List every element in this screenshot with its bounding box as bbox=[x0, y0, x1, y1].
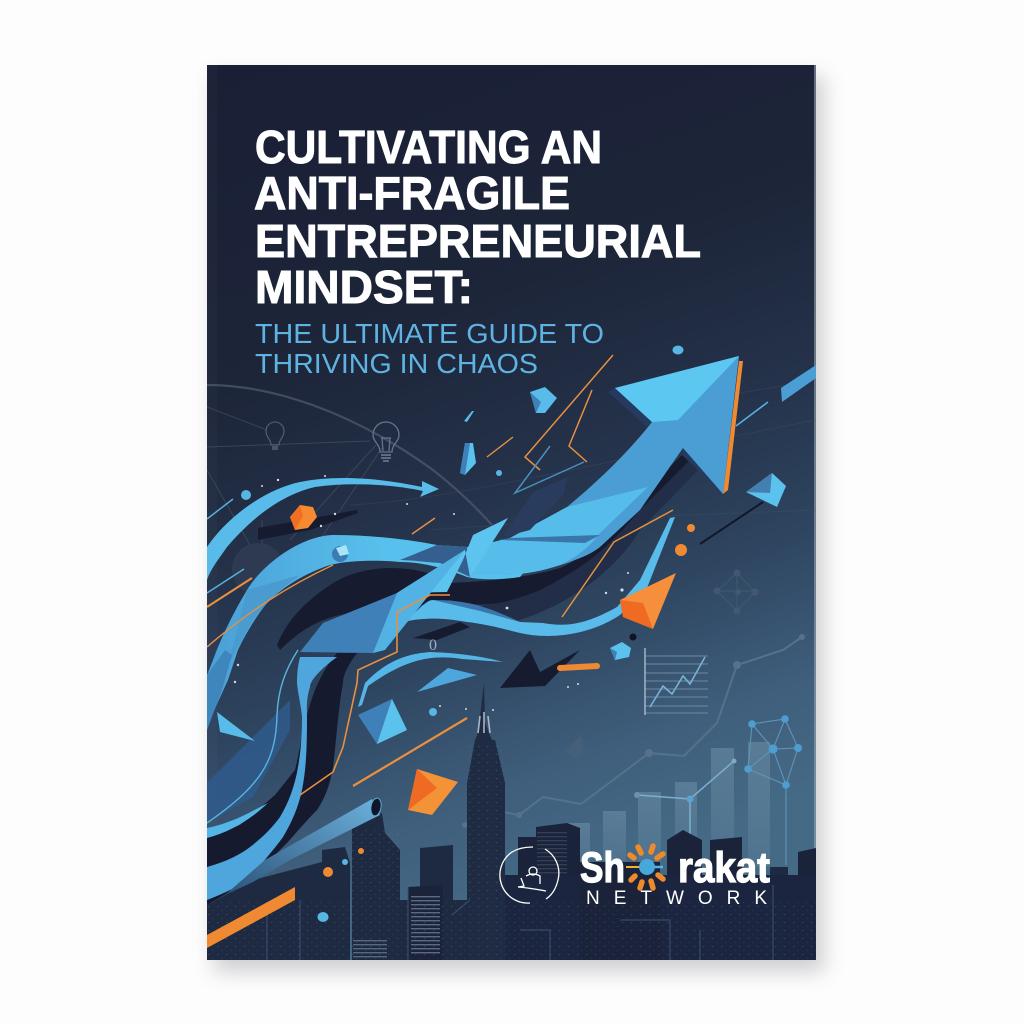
title: ENTREPRENEURIAL bbox=[255, 215, 701, 267]
gem: left kite bbox=[217, 712, 255, 741]
dark line bbox=[700, 502, 763, 544]
icon: large light bulb bbox=[373, 422, 399, 461]
gem: center kite bbox=[417, 668, 477, 692]
gem: top pentagon bbox=[530, 387, 557, 413]
shadow navy band bbox=[480, 462, 698, 620]
title: CULTIVATING AN bbox=[255, 121, 602, 173]
orange lines bbox=[207, 355, 673, 795]
big arrow bbox=[470, 356, 743, 575]
subtitle: THRIVING IN CHAOS bbox=[255, 348, 538, 379]
icon: small light bulb bbox=[266, 422, 284, 449]
ribbon: large flowing band bbox=[207, 535, 523, 730]
gem: orange pentagon bbox=[408, 769, 458, 815]
arrow orange edge bbox=[723, 361, 743, 494]
arrow lower shaft highlight bbox=[491, 487, 648, 575]
arrow back shadow bbox=[608, 388, 652, 427]
panel: book cover bbox=[207, 65, 816, 960]
gem: tall shard bbox=[460, 443, 476, 475]
subtitle bbox=[255, 318, 604, 379]
tower with spire bbox=[467, 683, 505, 960]
thin curve bbox=[207, 650, 298, 823]
ribbon: black swoosh under arrow bbox=[277, 455, 690, 650]
dark small bands bbox=[413, 622, 470, 640]
logo: sun icon bbox=[626, 846, 663, 888]
icon: orange hexagon bbox=[290, 505, 317, 530]
gear disc bbox=[232, 543, 280, 590]
book drop shadow bbox=[214, 76, 824, 972]
orange pill bbox=[560, 666, 597, 668]
network constellation bbox=[744, 715, 802, 865]
subtitle: THE ULTIMATE GUIDE TO bbox=[255, 318, 604, 349]
logo: wordmark: Sh bbox=[580, 844, 625, 892]
gem: pyramid bbox=[358, 699, 407, 744]
ribbon: thin lower-left sliver bbox=[207, 803, 268, 838]
icon: orange bar bbox=[207, 887, 295, 948]
line chart: blue dots bbox=[634, 758, 736, 834]
gem: small cube bbox=[610, 642, 631, 660]
ribbon: center dark shard bbox=[300, 565, 441, 653]
title: ANTI-FRAGILE bbox=[254, 167, 570, 219]
line chart: grey growth line bbox=[462, 634, 805, 828]
icon: small cube bbox=[332, 545, 349, 562]
city skyline bbox=[207, 683, 816, 960]
ribbon: long lower band bbox=[403, 517, 675, 636]
translucent bar chart bbox=[568, 742, 770, 867]
dots bbox=[234, 346, 695, 922]
faint polygon bbox=[566, 736, 584, 756]
thin blue lines bbox=[207, 402, 768, 593]
infographic canvas bbox=[204, 65, 834, 982]
logo: circular emblem bbox=[500, 847, 559, 903]
ribbon: vertical blue band bbox=[207, 657, 337, 900]
logo: wordmark: NETWORK bbox=[586, 888, 767, 909]
ribbon: black vertical swoosh bbox=[207, 653, 357, 905]
gem: orange pyramid bbox=[620, 573, 676, 629]
logo: wordmark: rakat bbox=[678, 844, 770, 892]
logo: wordmark bbox=[580, 844, 770, 909]
mini stock chart bbox=[645, 648, 708, 715]
shards and gems bbox=[217, 387, 786, 815]
title bbox=[254, 121, 701, 313]
arc arrow bbox=[207, 478, 439, 580]
faint background arc and bulbs bbox=[207, 380, 816, 560]
tube bbox=[225, 797, 382, 895]
ribbon: center light shard bbox=[373, 518, 508, 653]
arrow shaft and head bbox=[500, 356, 739, 575]
dark bar behind hexagon bbox=[258, 510, 358, 540]
dark shard bbox=[500, 650, 580, 688]
title: MINDSET: bbox=[255, 261, 473, 313]
blue bar top right bbox=[781, 365, 816, 402]
small numeral: 0 bbox=[429, 637, 437, 654]
ribbon: large lower-left dark blue band bbox=[207, 700, 290, 823]
gem: right diamond bbox=[746, 473, 786, 507]
diamond network, faint bbox=[714, 570, 758, 614]
dark shard behind arrow bbox=[503, 477, 568, 537]
